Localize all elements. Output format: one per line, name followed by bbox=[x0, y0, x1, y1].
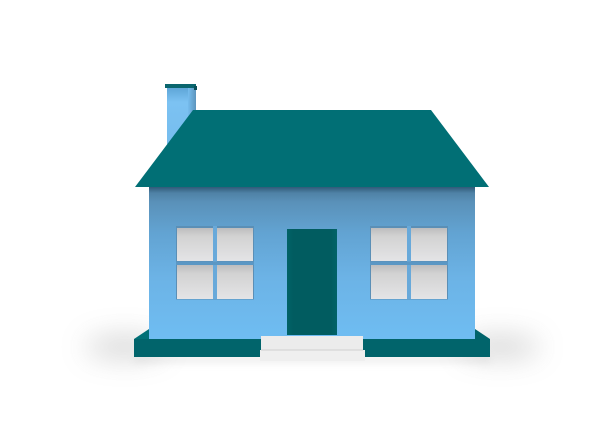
chimney bbox=[165, 84, 197, 144]
roof bbox=[135, 110, 489, 187]
foundation base bbox=[134, 329, 490, 357]
left window bbox=[176, 226, 254, 300]
house wall bbox=[149, 187, 475, 339]
right window bbox=[370, 226, 448, 300]
door bbox=[287, 229, 337, 335]
front steps bbox=[260, 336, 365, 361]
ground shadow bbox=[85, 336, 540, 362]
